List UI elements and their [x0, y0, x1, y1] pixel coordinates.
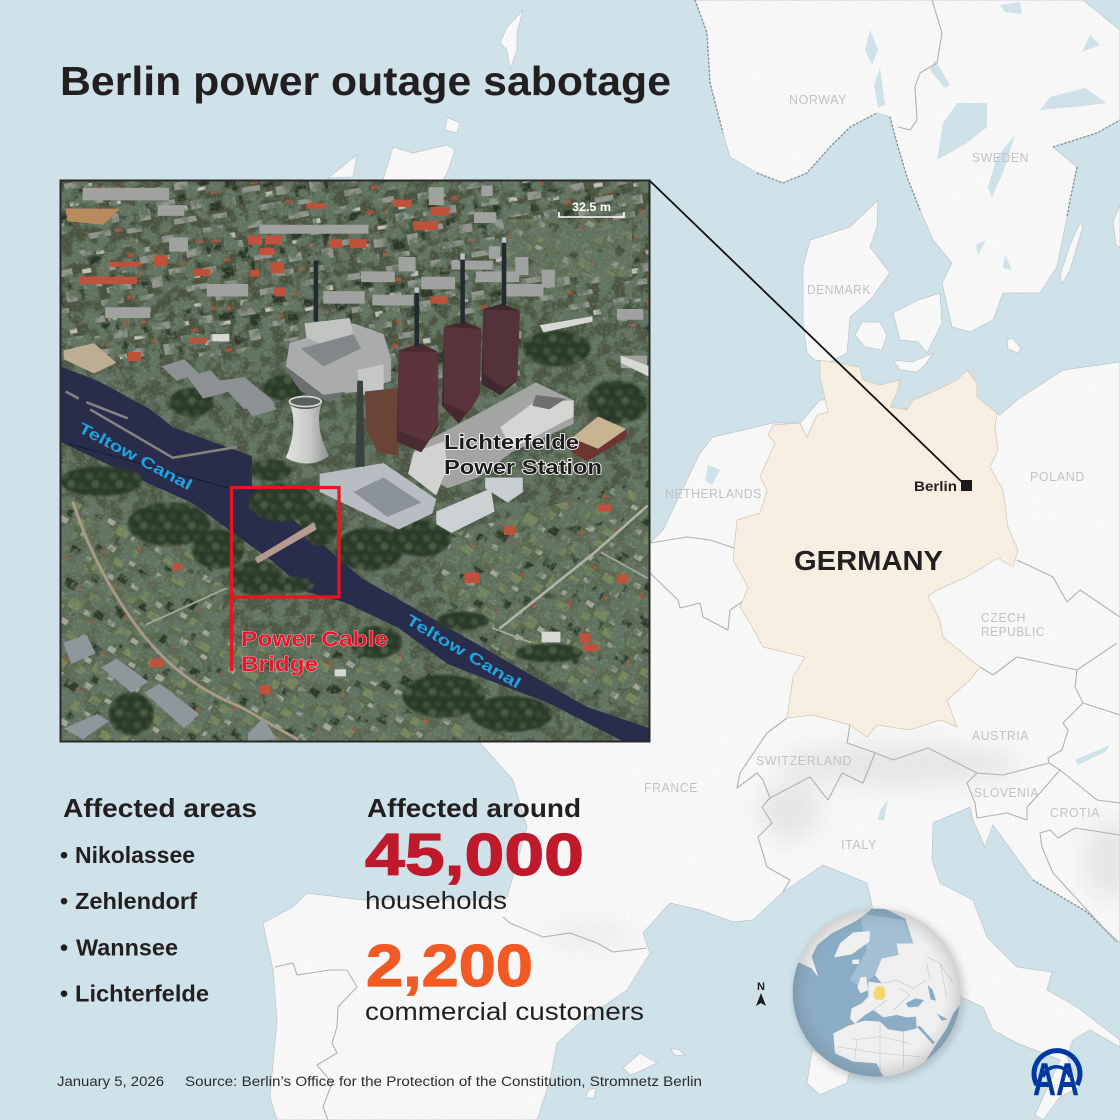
tennis court	[66, 209, 120, 225]
gray and white roofs	[83, 185, 647, 368]
map labels: NORWAY	[789, 93, 847, 107]
stat: 2,200 commercial customers	[365, 933, 644, 1026]
riverside warehouses	[162, 359, 276, 417]
rugged coast detail	[695, 0, 1120, 942]
text block: affected areas: Zehlendorf	[75, 888, 197, 914]
map labels: FRANCE	[644, 781, 698, 795]
three brick towers	[481, 304, 520, 395]
logo: AA news agency	[1033, 1051, 1080, 1105]
map labels: CZECH	[981, 611, 1026, 625]
Canada	[798, 909, 871, 978]
stat: 45,000 households	[365, 822, 584, 915]
map labels: ITALY	[841, 838, 877, 852]
callout: power cable bridge box and leader	[232, 488, 339, 671]
Germany highlighted	[733, 360, 1018, 737]
label: Power Cable Bridge: Bridge	[241, 653, 318, 676]
label: Power Cable Bridge: Power Cable	[241, 628, 388, 651]
map labels: REPUBLIC	[981, 625, 1045, 639]
alpine and terrain shading	[545, 745, 1120, 943]
Mediterranean	[855, 1010, 917, 1032]
map labels: CROTIA	[1050, 806, 1100, 820]
text block: affected areas: Lichterfelde	[75, 980, 209, 1006]
label: Teltow Canal upper: Teltow Canal	[75, 420, 195, 494]
scale bar: 32.5 m: 32.5 m	[572, 202, 611, 214]
text block: affected areas: Nikolassee	[75, 842, 195, 868]
Black Sea and Caspian	[906, 998, 924, 1007]
arctic band	[850, 913, 913, 987]
red roofs	[79, 200, 628, 694]
scale bar: 32.5 m	[559, 202, 624, 217]
stat: 45,000 households: 45,000	[365, 822, 584, 888]
tree canopy mottling	[60, 180, 650, 742]
country lines	[837, 957, 953, 1073]
Berlin marker and label	[914, 478, 972, 494]
label: GERMANY: GERMANY	[794, 545, 943, 576]
long boiler hall	[410, 383, 574, 488]
bottom-left residential blocks	[63, 635, 276, 742]
chimneys	[316, 237, 504, 347]
map labels: NETHERLANDS	[665, 487, 762, 501]
lower white buildings	[320, 463, 436, 529]
Berlin marker and label: Berlin	[914, 478, 957, 494]
title: Berlin power outage sabotage	[60, 58, 671, 104]
label: Teltow Canal lower: Teltow Canal	[403, 612, 524, 692]
Greenland and Iceland	[834, 931, 870, 957]
text block: affected areas: •	[60, 842, 68, 868]
roads	[73, 503, 647, 739]
map labels: POLAND	[1030, 470, 1085, 484]
photo frame	[60, 180, 650, 742]
lakes	[705, 2, 1110, 820]
text block: affected areas: Wannsee	[76, 934, 178, 960]
cooling tower	[286, 399, 329, 464]
locator globe	[790, 906, 968, 1084]
icon: north arrow	[756, 981, 766, 1006]
boiler block and stack	[365, 388, 399, 456]
Indian Ocean	[926, 1005, 960, 1061]
residential fabric	[60, 180, 650, 395]
text block: affected areas: Affected areas	[63, 793, 257, 823]
label: Lichterfelde Power Station	[444, 431, 602, 479]
logo: AA news agency: AA	[1033, 1053, 1079, 1105]
harbour quay and moored barges	[66, 391, 237, 458]
map labels: SLOVENIA	[974, 786, 1039, 800]
Red Sea and Gulf	[917, 1026, 935, 1044]
British Isles	[857, 977, 868, 993]
stat: 45,000 households: households	[365, 887, 507, 915]
map labels: SWEDEN	[972, 151, 1029, 165]
map labels	[644, 93, 1100, 852]
stat: 2,200 commercial customers: 2,200	[366, 933, 533, 999]
base map: land masses	[263, 0, 1120, 1120]
map labels: SWITZERLAND	[756, 754, 852, 768]
stat: 2,200 commercial customers: commercial customers	[365, 998, 644, 1026]
leader line from photo to Berlin	[650, 181, 963, 483]
map labels: DENMARK	[807, 283, 871, 297]
label: Lichterfelde Power Station: Lichterfelde	[444, 431, 579, 454]
label: Power Cable Bridge	[241, 628, 388, 676]
label: Lichterfelde Power Station: Power Station	[444, 456, 602, 479]
text block: affected around: Affected around	[367, 793, 581, 823]
ocean	[792, 908, 914, 1077]
tree belts on canal banks	[60, 331, 647, 736]
text block: affected areas: •	[60, 888, 68, 914]
footer: date: January 5, 2026	[57, 1073, 164, 1089]
footer: source: Source: Berlin’s Office for the Protection of the Constitution, Stromnetz Berlin	[185, 1073, 702, 1089]
icon: north arrow: N	[757, 981, 765, 993]
text block: affected around	[365, 793, 644, 1026]
power cable bridge	[255, 522, 317, 564]
text block: affected areas: •	[60, 980, 68, 1006]
map labels: AUSTRIA	[972, 729, 1029, 743]
sandy roof building	[572, 417, 626, 449]
canal water	[60, 366, 650, 742]
Germany	[873, 986, 886, 1000]
text block: affected areas	[60, 793, 257, 1006]
power station: turbine halls	[286, 323, 391, 395]
country borders	[275, 0, 1120, 1120]
panel: aerial photo of Lichterfelde power station	[60, 180, 650, 742]
text block: affected areas: •	[60, 934, 68, 960]
